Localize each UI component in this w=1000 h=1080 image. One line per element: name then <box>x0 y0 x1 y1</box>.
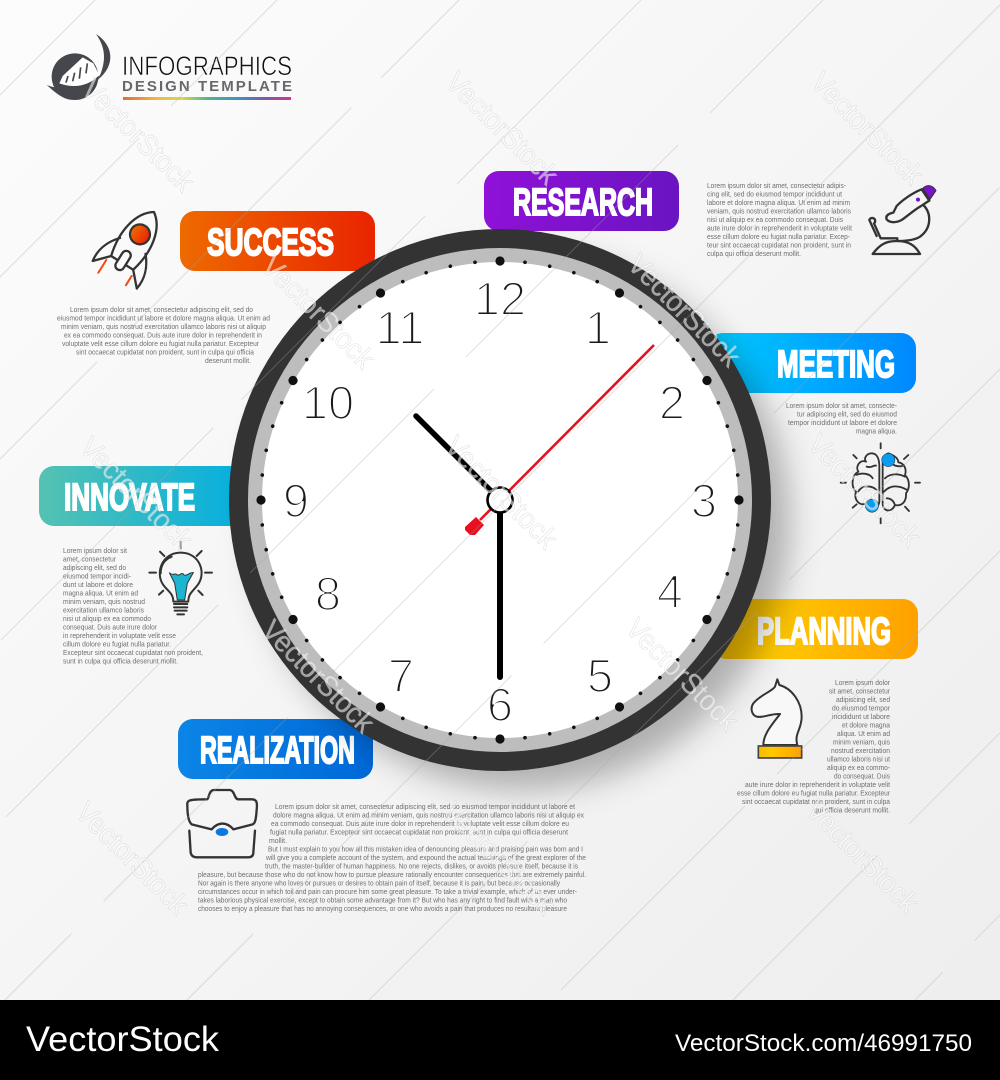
text: innovate: sunt in culpa qui officia deserunt mollit. <box>63 656 178 666</box>
text: meeting: magna aliqua. <box>856 426 897 436</box>
text: innovate: minim veniam, quis nostrud <box>63 597 145 606</box>
text: success: voluptate velit esse cillum dolore eu fugiat nulla pariatur. Excepteur <box>62 339 259 348</box>
text: research: veniam, quis nostrud exercitation ullamco laboris <box>707 206 851 216</box>
label: planning: PLANNING <box>757 611 891 653</box>
text: success: eiusmod tempor incididunt ut labore et dolore magna aliqua. Ut enim ad <box>57 314 270 322</box>
text: realization: dolore magna aliqua. Ut enim ad minim veniam, quis nostrud exercitation ullamco laboris nisi ut aliquip ex <box>273 810 584 820</box>
text: innovate: consequat. Duis aute irure dolor <box>63 622 157 632</box>
text: meeting: tur adipiscing elit, sed do eiusmod <box>797 410 897 418</box>
watermark text: VectorStock <box>255 250 381 376</box>
text: planning: esse cillum dolore eu fugiat nulla pariatur. Excepteur <box>737 788 890 798</box>
clock numbers: 12 <box>474 272 526 325</box>
clock <box>229 229 790 790</box>
text: success: Lorem ipsum dolor sit amet, consectetur adipiscing elit, sed do <box>70 305 253 314</box>
text: success: sint occaecat cupidatat non proident, sunt in culpa qui officia <box>76 348 255 356</box>
watermark text: VectorStock <box>73 431 199 557</box>
text: innovate: exercitation ullamco laboris <box>63 606 144 614</box>
text: innovate: adipiscing elit, sed do <box>63 563 126 572</box>
clock numbers: 2 <box>659 376 685 429</box>
text: success: deserunt mollit. <box>205 356 251 365</box>
text: realization: circumstances occur in which toil and pain can procure him some great pleasure. To take a trivial example, which of us ever under- <box>198 887 577 896</box>
logo mark <box>47 34 110 100</box>
logo subtitle: DESIGN TEMPLATE <box>122 78 292 95</box>
text: success <box>57 305 270 365</box>
text: realization: pleasure, but because those who do not know how to pursue pleasure rationally encounter consequences that are extremely painful. <box>198 870 586 879</box>
clock numbers <box>283 272 717 731</box>
text: realization: takes laborious physical exercise, except to obtain some advantage from it? But who has any right to find fault with a man who <box>198 896 567 904</box>
text: planning: do eiusmod tempor <box>832 704 890 712</box>
text: innovate: magna aliqua. Ut enim ad <box>63 588 138 598</box>
text: innovate: cillum dolore eu fugiat nulla pariatur. <box>63 640 171 648</box>
icon: microscope <box>869 186 936 254</box>
watermark text: VectorStock <box>801 428 927 554</box>
logo title: INFOGRAPHICS <box>122 51 292 81</box>
rainbow bar <box>123 97 291 100</box>
watermark text: VectorStock <box>69 796 195 922</box>
text: innovate: in reprehenderit in voluptate velit esse <box>63 631 176 640</box>
label: planning <box>712 599 918 659</box>
text: planning: sit amet, consectetur <box>829 686 890 696</box>
watermark text: VectorStock <box>255 614 381 740</box>
watermark text: VectorStock <box>438 430 564 556</box>
text: planning: aute irure dolor in reprehenderit in voluptate velit <box>745 780 891 789</box>
text: realization: chooses to enjoy a pleasure that has no annoying consequences, or one who avoids a pain that produces no resultant pleasure <box>198 904 567 913</box>
text: meeting: tempor incididunt ut labore et dolore <box>788 418 897 427</box>
clock numbers: 11 <box>376 301 424 354</box>
text: success: minim veniam, quis nostrud exercitation ullamco laboris nisi ut aliquip <box>61 322 266 331</box>
clock face <box>262 262 738 738</box>
text: realization: ea commodo consequat. Duis aute irure dolor in reprehenderit in voluptate velit esse cillum dolore eu <box>271 819 569 828</box>
text: planning: nostrud exercitation <box>831 746 890 755</box>
text: research: nisi ut aliquip ex ea commodo consequat. Duis <box>707 215 843 224</box>
text: realization <box>198 802 586 913</box>
watermark text <box>69 66 930 922</box>
clock numbers: 9 <box>283 474 309 527</box>
text: research: esse cillum dolore eu fugiat nulla pariatur. Excep- <box>707 232 850 241</box>
text: innovate: Excepteur sint occaecat cupidatat non proident, <box>63 648 203 657</box>
second hand <box>465 345 654 535</box>
watermark text: VectorStock <box>436 796 562 922</box>
clock numbers: 5 <box>587 649 613 702</box>
icon: rocket <box>89 198 176 295</box>
label: innovate <box>39 466 254 526</box>
text: realization: Lorem ipsum dolor sit amet, consectetur adipiscing elit, sed do eiusmod tempor incididunt ut labore et <box>275 802 576 811</box>
watermark text: VectorStock <box>799 794 925 920</box>
text: research: aute irure dolor in reprehenderit in voluptate velit <box>707 224 853 232</box>
label: meeting: MEETING <box>777 344 895 386</box>
label: success <box>180 211 375 271</box>
text: planning: ullamco laboris nisi ut <box>827 754 891 764</box>
text: innovate: Lorem ipsum dolor sit <box>63 546 128 555</box>
text: innovate: eiusmod tempor incidi- <box>63 572 131 580</box>
text: planning: adipiscing elit, sed <box>836 695 890 704</box>
footer image id: VectorStock.com/46991750 <box>675 1030 972 1057</box>
footer band <box>0 1000 1000 1080</box>
label: meeting <box>708 333 916 393</box>
watermark text: VectorStock <box>75 73 201 199</box>
text: research: teur sint occaecat cupidatat non proident, sunt in <box>707 240 851 250</box>
clock rim <box>229 229 771 771</box>
text: innovate <box>63 546 203 666</box>
text: innovate: nisi ut aliquip ex ea commodo <box>63 614 151 623</box>
text: planning: incididunt ut labore <box>832 712 890 721</box>
logo <box>47 34 292 100</box>
watermark text: VectorStock <box>621 248 747 374</box>
clock numbers: 7 <box>388 649 414 702</box>
text: innovate: amet, consectetur <box>63 554 116 564</box>
icon: brain <box>841 443 920 523</box>
text: research: culpa qui officia deserunt mollit. <box>707 249 801 258</box>
label: success: SUCCESS <box>207 222 334 264</box>
text: planning: do consequat. Duis <box>834 772 890 780</box>
text: meeting <box>786 401 897 436</box>
text: meeting: Lorem ipsum dolor sit amet, consecte- <box>786 401 897 410</box>
clock numbers: 1 <box>585 301 611 354</box>
hour hand <box>416 416 500 500</box>
text: planning: qui officia deserunt mollit. <box>814 806 890 814</box>
minute hand <box>497 500 503 677</box>
text: research: labore et dolore magna aliqua. Ut enim ad minim <box>707 198 850 207</box>
watermark text: VectorStock <box>804 66 930 192</box>
text: realization: truth, the master-builder of human happiness. No one rejects, dislikes, or avoids pleasure itself, because it is <box>265 862 578 870</box>
text: planning: aliquip ex ea commo- <box>827 763 890 772</box>
footer brand: VectorStock <box>26 1020 220 1059</box>
label: innovate: INNOVATE <box>64 477 195 519</box>
center pin <box>488 488 512 512</box>
icon: briefcase <box>187 790 257 857</box>
clock numbers: 10 <box>302 376 354 429</box>
text: research: Lorem ipsum dolor sit amet, consectetur adipis- <box>707 181 846 190</box>
text: realization: will give you a complete account of the system, and expound the actual teachings of the great explorer of the <box>265 853 586 862</box>
text: realization: Nor again is there anyone who loves or pursues or desires to obtain pain of itself, because it is pain, but because occasionally <box>198 878 560 888</box>
text: success: ex ea commodo consequat. Duis aute irure dolor in reprehenderit in <box>64 330 262 340</box>
label: realization: REALIZATION <box>200 730 355 772</box>
watermark text: VectorStock <box>439 66 565 192</box>
icon: light bulb <box>149 542 212 614</box>
text: innovate: dunt ut labore et dolore <box>63 580 133 589</box>
text: planning: sint occaecat cupidatat non proident, sunt in culpa <box>742 797 891 806</box>
icon: chess knight <box>752 679 802 758</box>
label: research: RESEARCH <box>513 182 653 224</box>
clock numbers: 4 <box>657 565 683 618</box>
minute dots <box>256 256 744 744</box>
text: planning: aliqua. Ut enim ad <box>837 729 890 738</box>
text: planning: Lorem ipsum dolor <box>835 678 890 687</box>
label: research <box>484 171 679 231</box>
clock numbers: 3 <box>691 474 717 527</box>
text: research <box>707 181 853 258</box>
text: realization: fugiat nulla pariatur. Excepteur sint occaecat cupidatat non proident, sunt in culpa qui officia deserunt <box>270 828 569 836</box>
text: planning <box>737 678 891 814</box>
watermark text: VectorStock <box>619 612 745 738</box>
text: realization: mollit. <box>269 836 287 845</box>
clock shadow <box>254 254 790 790</box>
clock numbers: 6 <box>487 678 513 731</box>
text: realization: But I must explain to you how all this mistaken idea of denouncing pleasure and praising pain was born and I <box>268 844 583 854</box>
clock numbers: 8 <box>315 567 341 620</box>
clock inner ring <box>248 248 752 752</box>
text: planning: minim veniam, quis <box>833 738 890 746</box>
text: research: cing elit, sed do eiusmod tempor incididunt ut <box>707 190 843 198</box>
label: realization <box>178 719 373 779</box>
text: planning: et dolore magna <box>842 720 891 730</box>
